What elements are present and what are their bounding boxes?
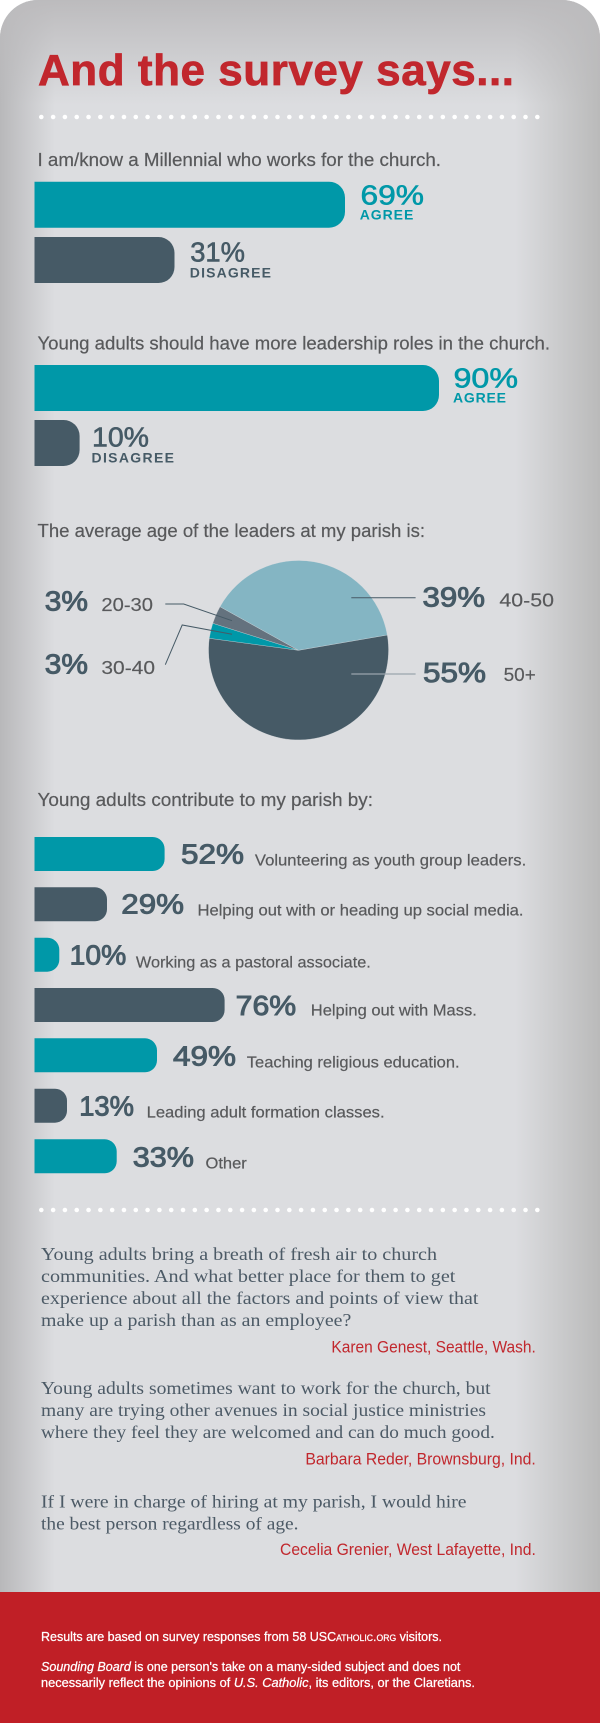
quote: Barbara Reder: Barbara Reder, Brownsburg, Ind. [305,1449,536,1468]
question 3: The average age of the leaders at my parish is: [38,521,425,541]
row: 33% other [34,1139,247,1173]
value: 90% agree [453,362,518,406]
row: 49% religious education: Teaching religious education. [247,1054,460,1071]
quote: Karen Genest: Karen Genest, Seattle, Wash. [331,1337,536,1356]
quote: Cecelia Grenier [41,1491,536,1559]
row: 29% social media: Helping out with or heading up social media. [198,902,524,919]
callout: 39% 40-50 [351,582,554,613]
value: 69% agree [360,180,424,222]
bar: 69% agree [34,182,345,228]
callout: 3% 30-40: 3% [45,648,88,679]
panel: how young adults contribute [34,790,526,1173]
footer notes: necessarily reflect the opinions of U.S. Catholic, its editors, or the Claretians. [41,1675,475,1690]
quote: Cecelia Grenier: Cecelia Grenier, West Lafayette, Ind. [280,1540,536,1559]
quote: Karen Genest: Young adults bring a breath of fresh air to church [41,1244,437,1264]
callout: 55% 50+: 55% [423,657,486,688]
quote: Karen Genest: make up a parish than as an employee? [41,1310,351,1330]
quote: Karen Genest: experience about all the factors and points of view that [41,1288,478,1308]
callout: 55% 50+: 50+ [504,665,536,685]
panel: millennial who works for the church [34,150,441,283]
row: 33% other: Other [206,1155,247,1172]
footer notes: Results are based on survey responses from 58 USCatholic.org visitors. [41,1629,442,1644]
callout: 39% 40-50: 39% [422,582,485,613]
row: 49% religious education: 49% [173,1041,236,1072]
bar: 90% agree [34,365,439,411]
row: 10% pastoral associate: 10% [70,940,126,971]
value: 10% disagree: DISAGREE [92,450,174,466]
row: 76% mass: 76% [236,990,296,1021]
quote: Cecelia Grenier: the best person regardless of age. [41,1513,298,1533]
quote: Karen Genest [41,1244,536,1356]
quote: Barbara Reder: where they feel they are welcomed and can do much good. [41,1422,495,1442]
row: 10% pastoral associate [34,938,371,972]
quote: Barbara Reder [41,1378,536,1468]
quote: Karen Genest: communities. And what better place for them to get [41,1266,455,1286]
footer band [0,1592,600,1723]
callout: 3% 20-30 [45,586,232,621]
row: 29% social media: 29% [121,889,184,920]
bar: 31% disagree [34,237,174,283]
quote: Barbara Reder: Young adults sometimes want to work for the church, but [41,1378,491,1398]
value: 90% agree: AGREE [453,390,506,406]
bar: 10% disagree [34,420,80,466]
footer notes: Sounding Board is one person's take on a many-sided subject and does not [41,1659,461,1674]
row: 13% adult formation: 13% [79,1091,134,1122]
value: 90% agree: 90% [454,362,518,393]
title: And the survey says... [38,46,514,95]
quote: Barbara Reder: many are trying other avenues in social justice ministries [41,1400,486,1420]
row: 52% volunteering [34,837,526,871]
pie chart [209,560,389,740]
value: 10% disagree: 10% [92,422,149,453]
value: 31% disagree [190,237,271,280]
row: 33% other: 33% [133,1142,194,1173]
callout: 39% 40-50: 40-50 [499,591,554,611]
value: 69% agree: 69% [360,180,424,211]
row: 76% mass: Helping out with Mass. [311,1002,477,1019]
row: 13% adult formation [34,1089,385,1123]
panel: average age of leaders [38,521,554,740]
question 2: Young adults should have more leadership roles in the church. [38,333,550,353]
row: 76% mass [34,988,477,1022]
question 4: Young adults contribute to my parish by: [38,790,373,810]
question 1: I am/know a Millennial who works for the church. [38,150,441,170]
callout: 3% 30-40: 30-40 [101,658,155,678]
panel: leadership roles [34,333,550,466]
row: 10% pastoral associate: Working as a pastoral associate. [136,954,371,971]
row: 13% adult formation: Leading adult formation classes. [147,1104,385,1121]
row: 29% social media [34,887,524,921]
value: 31% disagree: DISAGREE [190,264,271,280]
value: 31% disagree: 31% [190,237,245,268]
callout: 55% 50+ [351,657,536,688]
footer notes [41,1629,475,1690]
quote: Cecelia Grenier: If I were in charge of hiring at my parish, I would hire [41,1491,467,1511]
row: 49% religious education [34,1038,460,1072]
callout: 3% 30-40 [45,625,232,679]
row: 52% volunteering: Volunteering as youth group leaders. [255,852,526,869]
value: 10% disagree [92,422,174,466]
value: 69% agree: AGREE [360,206,413,222]
row: 52% volunteering: 52% [181,838,244,869]
callout: 3% 20-30: 3% [45,586,88,617]
callout: 3% 20-30: 20-30 [101,595,153,615]
